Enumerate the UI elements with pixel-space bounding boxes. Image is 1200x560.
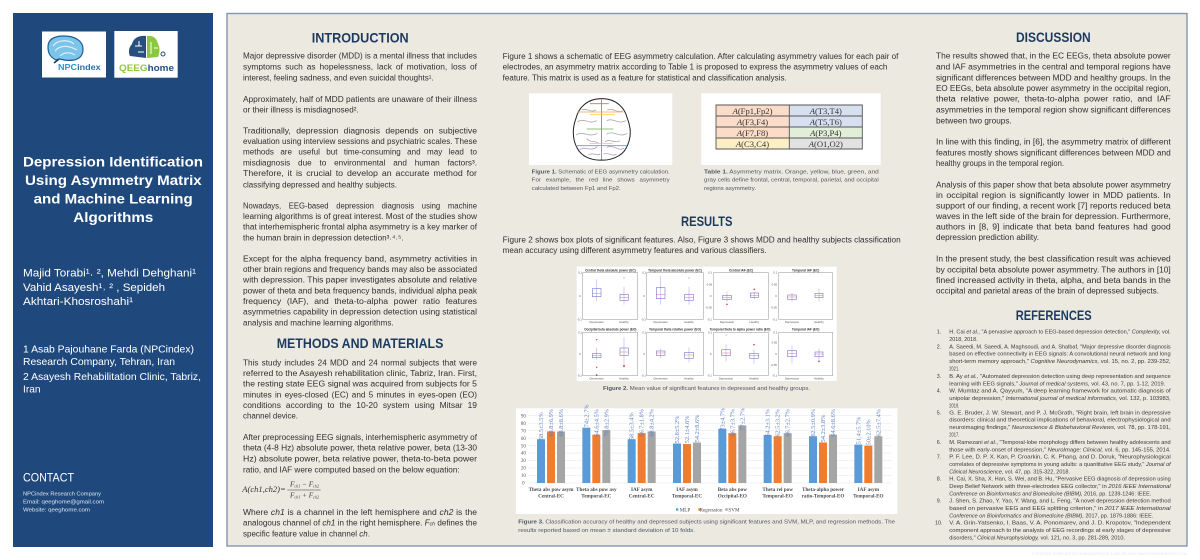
figure 2: box plots: 0.05	[772, 341, 778, 345]
section: methods and materials	[241, 335, 478, 538]
figure 3: classification accuracy bar chart: 62.5±7.4%	[875, 408, 882, 437]
list: references: 6.	[937, 440, 941, 446]
text: introduction body: Traditionally, depression diagnosis depends on subjective	[243, 126, 477, 135]
figure 2: box plots: -0.1	[772, 374, 778, 378]
figure 2: box plots: 0	[644, 294, 646, 298]
text: introduction body: analysis and machine learning algorithms.	[243, 318, 394, 327]
figure 2: box plots: 0.1	[642, 330, 646, 334]
figure 3: classification accuracy bar chart: Temporal-EC	[672, 493, 702, 499]
figure 3: classification accuracy bar chart: 50	[521, 444, 526, 449]
figure 3: classification accuracy bar chart: 66.7±1.8%	[639, 408, 646, 437]
table 1: asymmetry matrix	[701, 93, 881, 165]
list: references: those with early-onset of depression," NeuroImage: Clinical, vol. 6, pp. 145-155, 2014.	[949, 447, 1171, 453]
figure 2: box plots: Temporal IAF (EO)	[792, 328, 819, 332]
equation: asymmetry formula: ch2	[313, 484, 319, 488]
figure 3: classification accuracy bar chart: 40	[521, 452, 526, 457]
text: introduction body	[242, 52, 478, 327]
figure 2: box plots: -0.05	[770, 306, 777, 310]
list: references: 2021.	[949, 366, 959, 372]
list: references: 2019.	[949, 403, 959, 409]
table 1: asymmetry matrix: A(P3,P4)	[809, 128, 842, 138]
figure 3: classification accuracy bar chart: 68.8±4.2%	[649, 408, 656, 437]
figure 2: box plots: Healthy	[619, 376, 629, 380]
list: references: H. Cai, X. Sha, X. Han, S. Wei, and B. Hu, "Pervasive EEG diagnosis of depression using	[949, 477, 1171, 483]
text: figure 1 intro: Figure 1 shows a schematic of EEG asymmetry calculation. After calculating asymmetry values for each pair of	[503, 52, 899, 61]
text: methods body: minutes in eyes-closed (EC) and 5 minutes in eyes-open (EO)	[243, 390, 477, 399]
text: discussion body: features mostly shows significant differences between MDD and	[936, 148, 1171, 157]
text: introduction body: classifying depressed and healthy subjects.	[243, 180, 397, 189]
figure 2: box plots: Healthy	[814, 376, 824, 380]
text: introduction body: interest, feeling sadness, and even suicidal thoughts¹.	[243, 73, 434, 82]
text: discussion body: EO EEGs, beta absolute power asymmetry in the occipital region,	[936, 84, 1171, 93]
figure 2: box plots: 0.1	[773, 330, 778, 334]
figure 2: box plots: Central IAF (EC)	[729, 269, 753, 273]
figure 2: box plots: Depression	[654, 376, 668, 380]
title: and Machine Learning	[34, 190, 193, 206]
list: references: 10.	[935, 521, 942, 527]
figure 3: classification accuracy bar chart: 80	[521, 422, 526, 427]
figure 3: classification accuracy bar chart: 90	[521, 414, 526, 419]
caption: figure 1: For example, the red line shows asymmetry	[532, 178, 670, 184]
list: references: P. F. Lee, D. P. X. Kan, P. Croarkin, C. K. Phang, and D. Doruk, "Neurophysiological	[949, 455, 1171, 461]
text: methods body: the resting state EEG signal was acquired from subjects for 5	[243, 380, 478, 389]
figure 3: classification accuracy bar chart: 51.4±5.7%	[855, 416, 862, 444]
text: discussion body: Analysis of this paper show that beta absolute power asymmetry	[936, 180, 1171, 189]
table 1: asymmetry matrix: A(O1,O2)	[808, 139, 843, 149]
contact	[23, 473, 104, 514]
list: references: 5.	[937, 410, 941, 416]
list: references: 4.	[937, 389, 941, 395]
figure 3: classification accuracy bar chart: 70	[521, 429, 526, 434]
footer: template credit: © POSTER TEMPLATE BY GENIGRAPHICS® 1.800.790.4001 WWW.GENIGRAPHICS.COM	[1032, 552, 1187, 556]
section: results	[503, 213, 901, 534]
figure 2: box plots: Depression	[590, 376, 604, 380]
caption: figure 1: calculated between Fp1 and Fp2.	[532, 186, 621, 192]
figure 2: box plots: 0.1	[642, 271, 646, 275]
text: equation explanation: specific feature value in channel ch.	[243, 529, 370, 538]
figure 3: classification accuracy bar chart: 58.5±3.5%	[538, 412, 545, 440]
list: references: correlates of depressive symptoms in young adults: a quantitative EEG study," Journal of	[949, 462, 1171, 468]
equation: asymmetry formula: − F	[300, 480, 314, 488]
figure 3: classification accuracy bar chart	[516, 404, 897, 514]
list: references: Deep Belief Network with three-electrodes EEG collector," in 2016 IEEE International	[949, 484, 1172, 490]
caption: figure 1: Figure 1. Schematic of EEG asymmetry calculation.	[532, 170, 670, 176]
list: references: based on pervasive EEG and EEG splitting criterion," in 2017 IEEE International	[949, 506, 1172, 512]
figure 3: classification accuracy bar chart: 62.5±0.9%	[810, 408, 817, 437]
figure 3: classification accuracy bar chart: 54.2±3.8%	[820, 414, 827, 442]
list: references: J. Shen, S. Zhao, Y. Yao, Y. Wang, and L. Feng, "A novel depression detection method	[949, 499, 1171, 505]
text: discussion body: fined increased activity in theta, alpha, and beta bands in the	[936, 276, 1171, 285]
text: discussion body: In line with this finding, in [6], the asymmetry matrix of different	[936, 138, 1172, 147]
text: introduction body: methods are useful but time-consuming and may lead to	[243, 148, 478, 157]
text: introduction body: the human brain in depression detection³˒⁴˒⁵.	[243, 233, 404, 242]
text: discussion body	[935, 52, 1172, 296]
figure 2: box plots: 0.1	[578, 330, 582, 334]
list: references: 7.	[937, 455, 941, 461]
figure 2: box plots: Temporal theta to alpha power ratio (EO)	[710, 328, 770, 332]
list: references: M. Ramezani et al., "Temporal-lobe morphology differs between healthy adolescents and	[949, 440, 1171, 446]
figure 3: classification accuracy bar chart: ratio-Temporal-EO	[802, 493, 844, 499]
figure 1: brain schematic	[529, 93, 672, 165]
list: references: 2018, 2018.	[949, 337, 978, 343]
text: methods body: theta (4-8 Hz) absolute power, theta relative power, beta (13-30	[243, 444, 478, 453]
panel: main poster background	[227, 14, 1187, 546]
text: discussion body: healthy groups in the temporal region.	[936, 159, 1064, 168]
figure 3: classification accuracy bar chart: 74±2.7%	[583, 404, 590, 427]
figure 2: box plots: 0	[644, 352, 646, 356]
figure 3: classification accuracy bar chart: Theta-alpha power	[802, 487, 845, 493]
list: references: Conference on Bioinformatics and Biomedicine (BIBM), 2016, pp. 1239-1246: IEEE.	[949, 491, 1151, 497]
authors	[23, 268, 196, 308]
figure 3: classification accuracy bar chart: Beta abs pow	[718, 487, 747, 493]
text: introduction body: frequency (IAF), and theta-to-alpha power ratio features	[243, 297, 477, 306]
list: references	[935, 330, 1172, 541]
logo: NPCindex: NPCindex	[58, 62, 101, 72]
authors: Vahid Asayesh¹˒ ² , Sepideh	[23, 282, 165, 294]
list: references: 8.	[937, 477, 941, 483]
text: discussion body: asymmetries in the temporal region show significant differences	[936, 105, 1171, 114]
equation: asymmetry formula: ch1	[294, 494, 300, 500]
affiliations: Iran	[23, 385, 40, 396]
figure 2: box plots: 0.1	[708, 330, 712, 334]
list: references: unipolar depression," International journal of medical informatics, vol. 132, p. 103983,	[949, 396, 1171, 402]
figure 2: box plots: Temporal theta absolute power (EC)	[648, 269, 702, 273]
figure 2: box plots: 0	[579, 352, 581, 356]
list: references: Conference on Bioinformatics and Biomedicine (BIBM), 2017, pp. 1879-1886: IEEE.	[949, 513, 1153, 519]
figure 2: box plots: Depression	[785, 376, 800, 380]
figure 2: box plots: 0.05	[707, 282, 713, 286]
caption: figure 2: Figure 2. Mean value of significant features in depressed and healthy groups.	[603, 386, 810, 392]
figure 3: classification accuracy bar chart: Central-EC	[629, 493, 655, 499]
text: introduction body: misdiagnosis due to environmental and human factors³.	[243, 158, 477, 167]
heading: introduction: INTRODUCTION	[312, 29, 409, 45]
equation: asymmetry formula	[241, 480, 321, 500]
table 1: asymmetry matrix: A(F7,F8)	[736, 128, 768, 138]
equation: asymmetry formula: ch1	[294, 484, 300, 488]
figure 2: box plots: Healthy	[684, 320, 694, 324]
equation: asymmetry formula: A(ch1,ch2)=	[241, 484, 286, 494]
text: introduction body: with depression. This paper investigates absolute and relative	[242, 276, 477, 285]
figure 3: classification accuracy bar chart: 52.8±5.2%	[674, 415, 681, 443]
figure 2: box plots: Occipital beta absolute power (EO)	[584, 328, 636, 332]
text: methods body: referred to the Asayesh rehabilitation clinic, Tabriz, Iran. First,	[243, 369, 477, 378]
list: references: 2017.	[949, 432, 959, 438]
heading: methods and materials: METHODS AND MATERIALS	[277, 335, 443, 351]
text: introduction body: that interhemispheric frontal alpha asymmetry is a key marker of	[243, 223, 478, 232]
figure 2: box plots	[577, 267, 837, 381]
heading: results: RESULTS	[681, 213, 732, 229]
caption: table 1: gray cells define frontal, central, temporal, parietal, and occipital	[704, 178, 879, 184]
figure 3: classification accuracy bar chart: 60	[521, 437, 526, 442]
title: Depression Identification	[23, 154, 203, 170]
text: discussion body: by occipital beta absolute power asymmetry. The authors in [10]	[936, 265, 1171, 274]
figure 2: box plots: 0.1	[773, 271, 778, 275]
title	[23, 154, 203, 225]
figure 3: classification accuracy bar chart: 0	[522, 482, 525, 487]
text: discussion body: In the present study, the best classification result was achieved	[936, 255, 1171, 264]
figure 3: classification accuracy bar chart: Temporal-EO	[853, 493, 884, 499]
text: introduction body: Except for the alpha frequency band, asymmetry activities in	[243, 254, 477, 263]
figure 3: classification accuracy bar chart: 70.8±2.9%	[603, 408, 610, 437]
text: equation explanation: Where ch1 is a channel in the left hemisphere and ch2 is the	[243, 508, 477, 517]
list: references: component approach to the analysis of EEG recordings at early stages of depressive	[949, 528, 1171, 534]
figure 3: classification accuracy bar chart: Central-EC	[538, 493, 564, 499]
text: introduction body: Approximately, half of MDD patients are unaware of their illness	[243, 95, 477, 104]
text: discussion body: in occipital region is significantly lower in MDD patients. In	[936, 191, 1171, 200]
text: figure 1 intro: electrodes, an asymmetry matrix according to Table 1 is proposed to express the asymmetry values of each	[503, 63, 887, 72]
section: introduction	[242, 29, 478, 327]
text: methods body	[243, 358, 478, 474]
text: figure 1 intro	[503, 52, 899, 82]
figure 3: classification accuracy bar chart: IAF asym	[676, 487, 698, 493]
text: introduction body: other brain regions and frequency bands may also be associated	[243, 265, 477, 274]
figure 2: box plots: -0.1	[707, 374, 712, 378]
panel: title sidebar	[13, 13, 213, 547]
text: discussion body: support of our finding, a recent work [7] reports reduced beta	[936, 201, 1171, 210]
text: introduction body: asymmetries capability in depression detection using statistical	[243, 308, 477, 317]
figure 2: box plots: -0.1	[641, 374, 646, 378]
list: references: 2.	[937, 344, 941, 350]
text: methods body: Hz) absolute power, beta relative power, theta-to-beta power	[243, 454, 477, 463]
figure 2: box plots: 0	[710, 294, 712, 298]
authors: Majid Torabi¹˒ ², Mehdi Dehghani¹	[23, 268, 196, 280]
figure 2: box plots: -0.1	[641, 317, 646, 321]
logo: NPCindex	[42, 32, 106, 78]
table 1: asymmetry matrix: A(F3,F4)	[736, 117, 768, 127]
text: discussion body: occipital and parietal areas of the brain of depressed subjects.	[936, 287, 1159, 296]
caption: figure 1	[532, 170, 670, 192]
figure 3: classification accuracy bar chart: Temporal-EO	[762, 493, 793, 499]
figure 2: box plots: 0.05	[772, 282, 778, 286]
legend: MLP	[680, 507, 690, 513]
figure 3: classification accuracy bar chart: IAF asym	[858, 487, 880, 493]
figure 2: box plots: Healthy	[814, 320, 824, 324]
list: references: V. A. Grin-Yatsenko, I. Baas, V. A. Ponomarev, and J. D. Kropotov, "Independent	[949, 521, 1171, 527]
figure 3: classification accuracy bar chart: 77±2.7%	[739, 407, 746, 431]
figure 2: box plots: Healthy	[750, 320, 760, 324]
caption: table 1: Table 1. Asymmetry matrix. Orange, yellow, blue, green, and	[704, 170, 879, 176]
figure 2: box plots: Depression	[654, 320, 668, 324]
figure 3: classification accuracy bar chart: 50±2.10%	[865, 418, 872, 445]
figure 3: classification accuracy bar chart: 66.7±3.7%	[729, 408, 736, 437]
figure 2: box plots: -0.05	[770, 363, 777, 367]
logo: QEEGhome: QEEGhome	[119, 63, 174, 73]
text: results intro: mean accuracy using different asymmetry features and various classifiers.	[503, 246, 767, 255]
figure 2: box plots: Depression	[785, 320, 800, 324]
figure 2: box plots: 0	[775, 352, 777, 356]
table 1: asymmetry matrix: A(T5,T6)	[809, 117, 842, 127]
figure 3: classification accuracy bar chart: 64.6±4.5%	[593, 408, 600, 437]
section: schematic and matrix	[503, 52, 899, 192]
text: results intro	[503, 235, 901, 255]
text: discussion body: The results showed that, in the EC EEGs, theta absolute power	[936, 52, 1171, 61]
text: results intro: Figure 2 shows box plots of significant features. Also, Figure 3 shows MDD and healthy subjects classification	[503, 235, 901, 244]
list: references: 1.	[937, 330, 941, 336]
text: figure 1 intro: feature. This matrix is used as a feature for statistical and classification analysis.	[503, 73, 787, 82]
figure 2: box plots: Central theta absolute power (EC)	[585, 269, 636, 273]
figure 2: box plots: 0	[579, 294, 581, 298]
affiliations	[23, 345, 201, 396]
heading: references: REFERENCES	[1016, 307, 1092, 323]
text: introduction body: power of theta and beta frequency bands, individual alpha peak	[243, 286, 477, 295]
list: references: learning with EEG signals," Journal of medical systems, vol. 43, no. 7, pp. 1-12, 2019.	[949, 381, 1165, 387]
heading: discussion: DISCUSSION	[1016, 29, 1091, 45]
figure 2: box plots: Healthy	[619, 320, 629, 324]
logo: QEEGhome	[114, 31, 178, 78]
text: discussion body: between two groups.	[936, 116, 1012, 125]
section: discussion	[935, 29, 1172, 296]
figure 3: classification accuracy bar chart: 64.2±3.1%	[765, 408, 772, 437]
text: discussion body: theta relative power, theta-to-alpha power ratio, and IAF	[936, 95, 1171, 104]
figure 2: box plots: Healthy	[749, 376, 759, 380]
legend: Regression	[700, 507, 723, 513]
text: introduction body: evaluation using interview sessions and psychiatric scales. These	[243, 137, 477, 146]
list: references: disorders: clinical and theoretical implications of behavioral, electrophysiological and	[949, 418, 1171, 424]
list: references: short-term memory approach," Cognitive Neurodynamics, vol. 15, no. 2, pp. 239-252,	[949, 359, 1171, 365]
caption: table 1	[704, 170, 879, 192]
equation: asymmetry formula: F	[290, 480, 294, 488]
legend: SVM	[728, 507, 740, 513]
figure 2: box plots: -0.1	[772, 317, 778, 321]
text: methods body: ratio, and IAF were computed based on the below equation:	[243, 465, 460, 474]
figure 2: box plots: -0.1	[577, 374, 582, 378]
figure 2: box plots: Depression	[719, 376, 734, 380]
contact: CONTACT	[23, 473, 74, 485]
text: methods body: conditions according to the 10-20 system using Mitsar 19	[243, 401, 477, 410]
list: references: Clinical Neuroscience, vol. 47, pp. 315-322, 2018.	[949, 469, 1070, 475]
figure 3: classification accuracy bar chart: 62.5±3.2%	[775, 408, 782, 437]
figure 3: classification accuracy bar chart: IAF asym	[631, 487, 653, 493]
list: references: H. Cai et al., "A pervasive approach to EEG-based depression detection," Complexity, vol.	[949, 330, 1171, 336]
title: Algorithms	[73, 209, 154, 225]
text: equation explanation	[243, 508, 477, 538]
figure 2: box plots: -0.1	[577, 317, 582, 321]
figure 3: classification accuracy bar chart: Occipital-EO	[718, 493, 747, 499]
text: discussion body: significant differences between MDD and healthy groups. In the	[936, 73, 1171, 82]
text: discussion body: authors in [8, 9] indicate that beta band features had good	[936, 223, 1171, 232]
figure 2: box plots: Temporal theta relative power (EO)	[649, 328, 701, 332]
affiliations: Research Company, Tehran, Iran	[23, 357, 175, 368]
contact: Website: qeeghome.com	[23, 508, 90, 514]
text: equation explanation: analogous channel of ch1 in the right hemisphere. Fch defines the	[243, 519, 477, 528]
caption: figure 3: Figure 3. Classification accuracy of healthy and depressed subjects using significant features and SVM, MLP, and regression methods. The	[518, 520, 896, 526]
list: references: 9.	[937, 499, 941, 505]
list: references: neuroimaging findings," Neuroscience & Biobehavioral Reviews, vol. 78, pp. 178-191,	[949, 425, 1171, 431]
figure 2: box plots: Temporal IAF (EC)	[792, 269, 819, 273]
list: references: A. Saeedi, M. Saeedi, A. Maghsoudi, and A. Shalbaf, "Major depressive disorder diagnosis	[949, 344, 1171, 350]
list: references: B. Ay et al., "Automated depression detection using deep representation and sequence	[949, 374, 1171, 380]
title: Using Asymmetry Matrix	[25, 172, 202, 188]
text: discussion body: waves in the left side of the brain for depression. Furthermore,	[935, 212, 1171, 221]
figure 3: classification accuracy bar chart: 52.1±4.6%	[684, 415, 691, 443]
legend	[676, 507, 740, 513]
figure 3: classification accuracy bar chart: Theta abs pow asy	[576, 487, 617, 493]
figure 3: classification accuracy bar chart: Theta rel pow	[762, 487, 793, 493]
caption: table 1: regions asymmetry.	[704, 186, 756, 192]
caption: figure 3	[518, 520, 896, 534]
figure 3: classification accuracy bar chart: 54.2±8.6%	[694, 414, 701, 442]
text: introduction body: learning algorithms is of great interest. Most of the studies show	[243, 212, 477, 221]
affiliations: 2 Asayesh Rehabilitation Clinic, Tabriz,	[23, 372, 201, 383]
table 1: asymmetry matrix: A(T3,T4)	[809, 106, 842, 116]
figure 2: box plots: 0.1	[708, 271, 712, 275]
figure 3: classification accuracy bar chart: Temporal-EC	[581, 493, 612, 499]
text: introduction body: or their illness is misdiagnosed².	[243, 105, 359, 114]
equation: asymmetry formula: + F	[300, 492, 314, 500]
equation: asymmetry formula: F	[290, 492, 294, 500]
figure 2: box plots: 0	[775, 294, 777, 298]
text: methods body: channel device.	[243, 412, 298, 421]
text: discussion body: and IAF asymmetries in the central and temporal regions have	[936, 63, 1171, 72]
table 1: asymmetry matrix: A(Fp1,Fp2)	[732, 106, 773, 116]
figure 2: box plots: Healthy	[684, 376, 694, 380]
text: introduction body: symptoms such as hopelessness, lack of motivation, loss of	[243, 63, 478, 72]
figure 2: box plots: -0.1	[707, 317, 712, 321]
caption: figure 3: results reported based on mean ± standard deviation of 10 folds.	[518, 528, 695, 534]
figure 2: box plots: -0.05	[705, 306, 712, 310]
figure 3: classification accuracy bar chart: 68.8±8.6%	[558, 408, 565, 437]
text: introduction body: Nowadays, EEG-based depression diagnosis using machine	[243, 201, 477, 210]
figure 3: classification accuracy bar chart: 64.6±8.6%	[830, 408, 837, 437]
figure 3: classification accuracy bar chart: 30	[521, 459, 526, 464]
table 1: asymmetry matrix: A(C3,C4)	[735, 139, 769, 149]
text: introduction body: Major depressive disorder (MDD) is a mental illness that includes	[243, 52, 477, 61]
list: references: G. E. Bruder, J. W. Stewart, and P. J. McGrath, "Right brain, left brain in depressive	[949, 410, 1171, 416]
list: references: W. Mumtaz and A. Qayyum, "A deep learning framework for automatic diagnosis of	[949, 389, 1171, 395]
list: references: based on effective connectivity in EEG signals: A convolutional neural network and long	[949, 352, 1171, 358]
figure 3: classification accuracy bar chart: Theta abs pow asym	[529, 487, 574, 493]
figure 2: box plots: Depression	[590, 320, 604, 324]
figure 3: classification accuracy bar chart: 10	[521, 474, 526, 479]
figure 2: box plots: 0.1	[578, 271, 582, 275]
text: methods body: This study includes 24 MDD and 24 normal subjects that were	[243, 358, 477, 367]
text: introduction body: Therefore, it is crucial to develop an accurate method for	[243, 169, 477, 178]
figure 3: classification accuracy bar chart: 73±4.7%	[719, 407, 726, 431]
list: references: disorders," Clinical Neurophysiology, vol. 121, no. 3, pp. 281-289, 2010.	[949, 535, 1125, 541]
text: discussion body: depression prediction ability.	[936, 233, 1039, 242]
affiliations: 1 Asab Pajouhane Farda (NPCindex)	[23, 345, 194, 356]
text: methods body: After preprocessing EEG signals, interhemispheric asymmetry of	[243, 433, 478, 442]
figure 3: classification accuracy bar chart: 20	[521, 467, 526, 472]
figure 2: box plots: Depression	[720, 320, 735, 324]
figure 2: box plots: 0	[710, 352, 712, 356]
figure 3: classification accuracy bar chart: 58.5±3.4%	[629, 412, 636, 440]
figure 3: classification accuracy bar chart: 66.7±2.7%	[785, 408, 792, 437]
equation: asymmetry formula: ch2	[313, 494, 319, 500]
section: references	[935, 307, 1172, 541]
contact: Email: qeeghome@gmail.com	[23, 500, 104, 506]
contact: NPCindex Research Company	[23, 492, 101, 498]
list: references: 3.	[937, 374, 941, 380]
authors: Akhtari-Khosroshahi¹	[23, 296, 133, 308]
figure 3: classification accuracy bar chart: 68.8±6.9%	[548, 408, 555, 437]
